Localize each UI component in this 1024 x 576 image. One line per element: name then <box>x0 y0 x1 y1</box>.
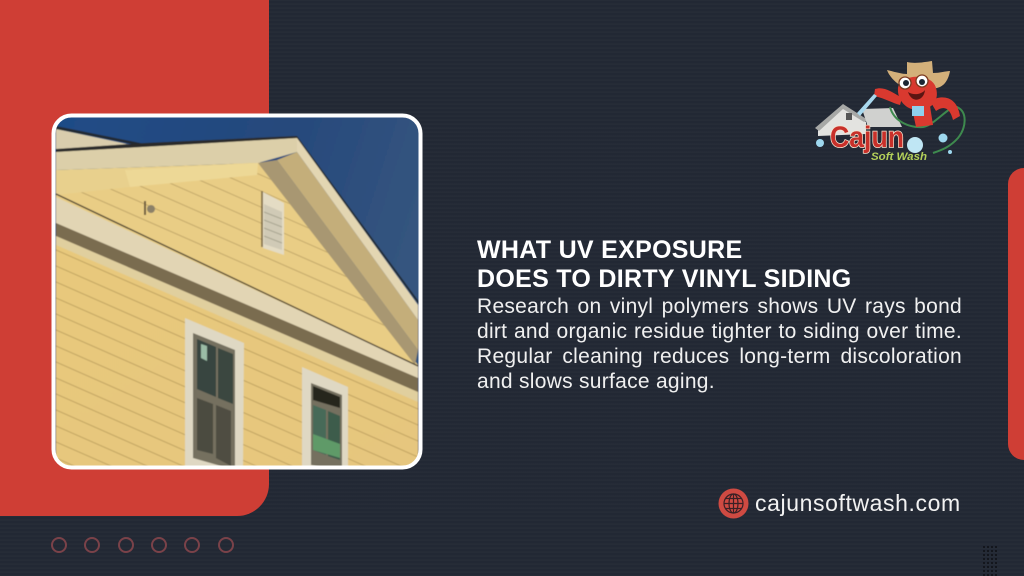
body text <box>477 295 962 393</box>
hat <box>887 61 950 88</box>
hose <box>890 107 965 153</box>
bucket <box>912 106 924 116</box>
body text: and slows surface aging. <box>477 370 715 393</box>
red panel: left background block <box>0 0 269 516</box>
eave <box>56 233 418 402</box>
fixture <box>144 201 155 215</box>
body text: Research on vinyl polymers shows UV rays bond <box>477 295 962 318</box>
rake shadow <box>258 160 418 365</box>
photo frame <box>54 116 420 468</box>
heading: DOES TO DIRTY VINYL SIDING <box>477 265 852 293</box>
photo: yellow vinyl-sided house gable against blue sky <box>52 114 422 470</box>
rake trim <box>297 138 418 320</box>
gable wall <box>56 160 418 380</box>
window 1 <box>185 318 244 470</box>
house <box>815 104 902 136</box>
wall <box>56 243 418 470</box>
fascia <box>56 138 297 170</box>
logo wordmark: Cajun <box>830 121 904 154</box>
logo subtitle: Soft Wash <box>871 151 927 163</box>
crawfish <box>874 75 960 127</box>
window 2 <box>302 367 348 470</box>
body text: Regular cleaning reduces long-term discoloration <box>477 345 962 368</box>
rake dark edge <box>297 136 420 306</box>
soffit <box>56 164 231 191</box>
heading <box>477 236 852 293</box>
red tab: right edge <box>1008 168 1024 460</box>
bubbles <box>816 134 952 154</box>
vent <box>262 191 284 255</box>
spray wand <box>857 94 877 116</box>
body text: dirt and organic residue tighter to siding over time. <box>477 320 962 343</box>
decorative circles row <box>51 537 234 553</box>
website url: cajunsoftwash.com <box>755 490 961 516</box>
gable siding lines <box>82 173 384 326</box>
heading: WHAT UV EXPOSURE <box>477 236 742 264</box>
far roof <box>56 129 132 150</box>
logo: Cajun Soft Wash crawfish mascot <box>815 61 966 163</box>
icon: globe <box>718 488 748 518</box>
rake soffit <box>277 152 418 350</box>
